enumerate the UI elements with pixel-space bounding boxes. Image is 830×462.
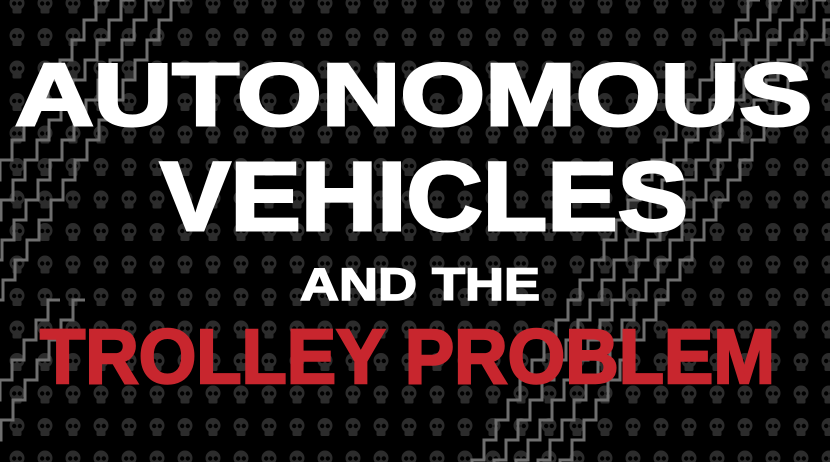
subtitle: and the: AND THE [300, 259, 540, 310]
title: autonomous: AUTONOMOUS [15, 45, 812, 144]
title: vehicles: VEHICLES [160, 142, 688, 251]
staircase band left [0, 0, 195, 462]
staircase band right [448, 0, 830, 462]
title: trolley problem: TROLLEY PROBLEM [40, 314, 775, 400]
